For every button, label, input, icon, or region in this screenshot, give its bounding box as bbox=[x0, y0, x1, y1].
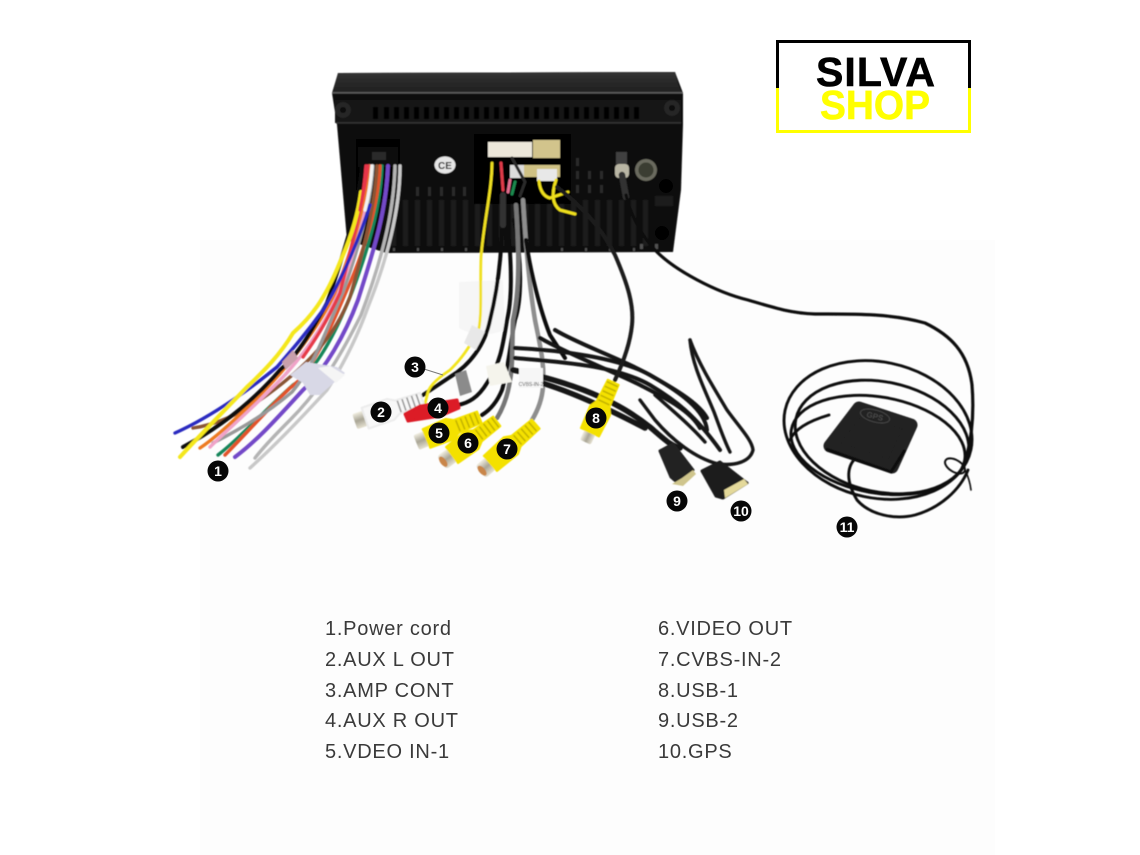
number badges: 1 bbox=[214, 463, 222, 479]
legend left column: 2.AUX L OUT bbox=[325, 649, 455, 671]
legend left column: 5.VDEO IN-1 bbox=[325, 741, 450, 763]
central harness wires bbox=[423, 158, 565, 420]
leader line for 3 bbox=[424, 369, 443, 375]
video cable 8 bbox=[557, 187, 632, 380]
yellow short loops bbox=[539, 180, 575, 214]
RCA yellow plug 6 bbox=[434, 413, 503, 472]
GPS antenna puck bbox=[826, 406, 911, 472]
number badges: 9 bbox=[673, 493, 681, 509]
number badges: 11 bbox=[840, 519, 855, 535]
legend left column: 1.Power cord bbox=[325, 618, 452, 640]
pale mount behind cables bbox=[459, 280, 505, 335]
number badges: 3 bbox=[411, 359, 419, 375]
head unit rear panel bbox=[332, 72, 683, 253]
legend right column bbox=[658, 618, 793, 763]
logo: Silva Shop bbox=[778, 42, 970, 132]
USB connector 10 bbox=[702, 462, 748, 498]
CE mark bbox=[434, 156, 456, 174]
RCA yellow plug 5 bbox=[412, 407, 483, 453]
connector block bbox=[488, 140, 560, 181]
number badges: 7 bbox=[503, 441, 511, 457]
cable tags: CVBS-IN-2 bbox=[519, 382, 544, 388]
number badges: 10 bbox=[733, 503, 749, 519]
legend right column: 10.GPS bbox=[658, 741, 732, 763]
legend right column: 6.VIDEO OUT bbox=[658, 618, 793, 640]
logo: Silva Shop: SILVA bbox=[816, 49, 935, 95]
yellow amp wire bbox=[422, 345, 470, 413]
legend left column bbox=[325, 618, 459, 763]
USB cable bundle bbox=[513, 330, 753, 464]
number badges: 6 bbox=[464, 435, 472, 451]
GPS cable and coil bbox=[622, 175, 985, 517]
USB connector 9 bbox=[660, 444, 696, 486]
power cord wires bbox=[175, 166, 400, 468]
legend left column: 3.AMP CONT bbox=[325, 680, 454, 702]
number badges bbox=[208, 356, 858, 538]
RCA yellow plug 8 bbox=[575, 378, 623, 447]
legend left column: 4.AUX R OUT bbox=[325, 710, 459, 732]
number badges: 8 bbox=[592, 410, 600, 426]
power connector bbox=[358, 147, 398, 167]
number badges: 4 bbox=[434, 400, 442, 416]
GPS antenna puck: GPS bbox=[866, 410, 885, 423]
logo: Silva Shop: SHOP bbox=[820, 82, 930, 128]
RCA white plug 2 bbox=[351, 388, 426, 432]
RCA red plug 4 bbox=[405, 400, 459, 421]
number badges: 5 bbox=[435, 425, 443, 441]
legend right column: 9.USB-2 bbox=[658, 710, 739, 732]
CE mark: CE bbox=[438, 161, 452, 172]
legend right column: 7.CVBS-IN-2 bbox=[658, 649, 782, 671]
cable tags bbox=[455, 325, 544, 396]
GPS antenna socket bbox=[615, 152, 657, 181]
wire harness clip bbox=[282, 350, 345, 395]
product photo: head unit and cables bbox=[175, 72, 985, 517]
RCA yellow plug 7 bbox=[473, 416, 543, 481]
number badges: 2 bbox=[377, 404, 385, 420]
legend right column: 8.USB-1 bbox=[658, 680, 739, 702]
